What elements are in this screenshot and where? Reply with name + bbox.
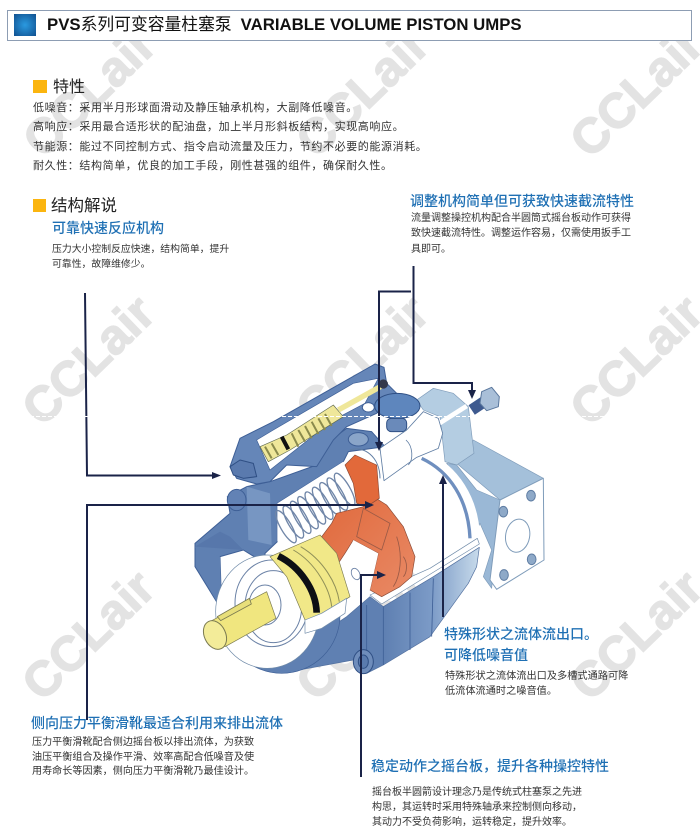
icon: blue square xyxy=(14,14,36,36)
callout heading: 侧向压力平衡滑靴最适合利用来排出流体 xyxy=(31,715,283,731)
callout: reliable fast response xyxy=(52,220,229,270)
callout heading: 调整机构简单但可获致快速截流特性 xyxy=(410,193,634,209)
callout body: 构思，其运转时采用特殊轴承来控制侧向移动， xyxy=(372,802,582,813)
arrow: adjusting mechanism right branch xyxy=(414,266,476,399)
features list xyxy=(33,102,427,172)
callout body xyxy=(411,212,631,254)
callout body: 流量调整操控机构配合半圆筒式摇台板动作可获得 xyxy=(411,212,631,224)
watermarks: CCLair: CCLair xyxy=(12,286,165,436)
callout heading: 稳定动作之摇台板，提升各种操控特性 xyxy=(371,758,609,774)
structure heading text: 结构解说 xyxy=(51,197,117,215)
adjusting bolt xyxy=(472,387,499,411)
arrow: swash plate xyxy=(361,571,386,777)
callout body: 其动力不受负荷影响，运转稳定，提升效率。 xyxy=(372,817,572,828)
callout body: 可靠性，故障维修少。 xyxy=(52,258,150,270)
watermarks: CCLair: CCLair xyxy=(286,561,439,711)
curved swash ring xyxy=(422,406,474,538)
callout body xyxy=(32,736,254,777)
upper control cylinder housing xyxy=(230,364,397,484)
callout body: 油压平衡组合及操作平滑、效率高配合低噪音及使 xyxy=(32,752,254,762)
drive shaft xyxy=(199,585,281,653)
arrow: fast response mechanism xyxy=(85,293,221,479)
callout: swash plate xyxy=(371,758,609,828)
callout body: 低流体流通时之噪音值。 xyxy=(445,686,557,697)
callout heading: 可降低噪音值 xyxy=(444,647,528,663)
features list: 耐久性：结构简单，优良的加工手段，刚性甚强的组件，确保耐久性。 xyxy=(33,160,393,172)
callout body: 特殊形状之流体流出口及多槽式通路可降 xyxy=(445,671,628,682)
watermarks: CCLair: CCLair xyxy=(286,18,439,168)
compensator knob xyxy=(362,393,420,432)
watermarks: CCLair: CCLair xyxy=(12,561,165,711)
callout body: 摇台板半圆箭设计理念乃是传统式柱塞泵之先进 xyxy=(372,787,582,798)
callout body xyxy=(372,786,582,828)
callout body: 致快速截流特性。调整运作容易，仅需使用扳手工 xyxy=(411,228,631,239)
watermarks: CCLair: CCLair xyxy=(286,286,439,436)
white stroke cylinder xyxy=(350,412,443,481)
callout body xyxy=(445,670,628,697)
return spring xyxy=(272,462,360,545)
callout heading xyxy=(444,626,598,663)
front lower wall xyxy=(290,538,479,674)
callout heading: 可靠快速反应机构 xyxy=(52,220,164,236)
yellow piston barrel xyxy=(270,535,350,633)
callout: side pressure balancing shoe xyxy=(31,715,283,777)
orange swash plate yoke xyxy=(322,455,415,597)
features list: 低噪音：采用半月形球面滑动及静压轴承机构，大副降低噪音。 xyxy=(33,102,358,114)
arrow: fluid outlet xyxy=(439,475,447,617)
callout body: 用寿命长等因素，侧向压力平衡滑靴乃最佳设计。 xyxy=(32,766,254,777)
icon: structure square xyxy=(33,199,46,212)
flange block and bracket xyxy=(417,388,544,589)
callout: fluid outlet xyxy=(444,626,628,697)
callout body: 压力平衡滑靴配合侧边摇台板以排出流体，为获致 xyxy=(32,737,254,748)
arrow: side pressure balancing shoe xyxy=(87,501,374,720)
left lower housing block xyxy=(195,428,385,610)
title text: PVS系列可变容量柱塞泵 VARIABLE VOLUME PISTON UMPS xyxy=(47,15,522,34)
callout body: 压力大小控制反应快速，结构简单，提升 xyxy=(52,244,229,254)
section: features xyxy=(33,78,427,172)
callout body xyxy=(52,244,229,270)
callout body: 具即可。 xyxy=(411,244,451,254)
features heading: 特性 xyxy=(53,79,85,96)
icon: features square xyxy=(33,80,47,93)
watermarks: CCLair: CCLair xyxy=(13,18,166,168)
callout heading: 特殊形状之流体流出口。 xyxy=(444,626,598,642)
features list: 高响应：采用最合适形状的配油盘，加上半月形斜板结构，实现高响应。 xyxy=(33,121,404,133)
illustration: variable volume piston pump cutaway xyxy=(195,364,544,674)
arrow: adjusting mechanism upper branch xyxy=(375,292,411,451)
front bearing housing disc xyxy=(195,547,340,673)
callout: adjusting mechanism xyxy=(410,193,634,254)
title bar xyxy=(7,10,692,41)
yellow control spring and rod xyxy=(260,379,388,462)
features list: 节能源：能过不同控制方式、指令启动流量及压力，节约不必要的能源消耗。 xyxy=(33,141,427,153)
section heading: structure xyxy=(33,197,117,215)
